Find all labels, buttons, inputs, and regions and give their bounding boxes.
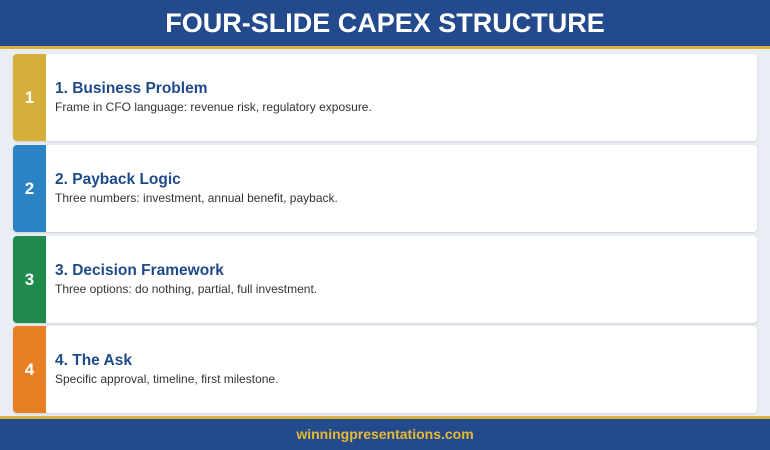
text 2: Three numbers: investment, annual benefit, payback.: [55, 191, 338, 205]
badge 1: [13, 54, 46, 141]
title: FOUR-SLIDE CAPEX STRUCTURE: [165, 8, 605, 38]
badge 3: 3: [25, 270, 34, 288]
text 4: Specific approval, timeline, first milestone.: [55, 372, 278, 386]
badge 1: 1: [25, 88, 34, 106]
footer: winningpresentations.com: [296, 426, 474, 442]
badge 3: [13, 236, 46, 323]
heading 4: 4. The Ask: [55, 352, 132, 369]
text 1: Frame in CFO language: revenue risk, regulatory exposure.: [55, 100, 372, 114]
badge 2: [13, 145, 46, 232]
panel: step 2: [13, 145, 757, 232]
panel: step 4: [13, 326, 757, 413]
badge 4: [13, 326, 46, 413]
footer: [0, 416, 770, 450]
panel: step 1: [13, 54, 757, 141]
heading 3: 3. Decision Framework: [55, 262, 224, 279]
text 3: Three options: do nothing, partial, full investment.: [55, 282, 317, 296]
heading 2: 2. Payback Logic: [55, 171, 181, 188]
heading 1: 1. Business Problem: [55, 80, 207, 97]
panel: step 3: [13, 236, 757, 323]
badge 2: 2: [25, 178, 34, 198]
badge 4: 4: [25, 360, 34, 378]
title: [0, 0, 770, 49]
